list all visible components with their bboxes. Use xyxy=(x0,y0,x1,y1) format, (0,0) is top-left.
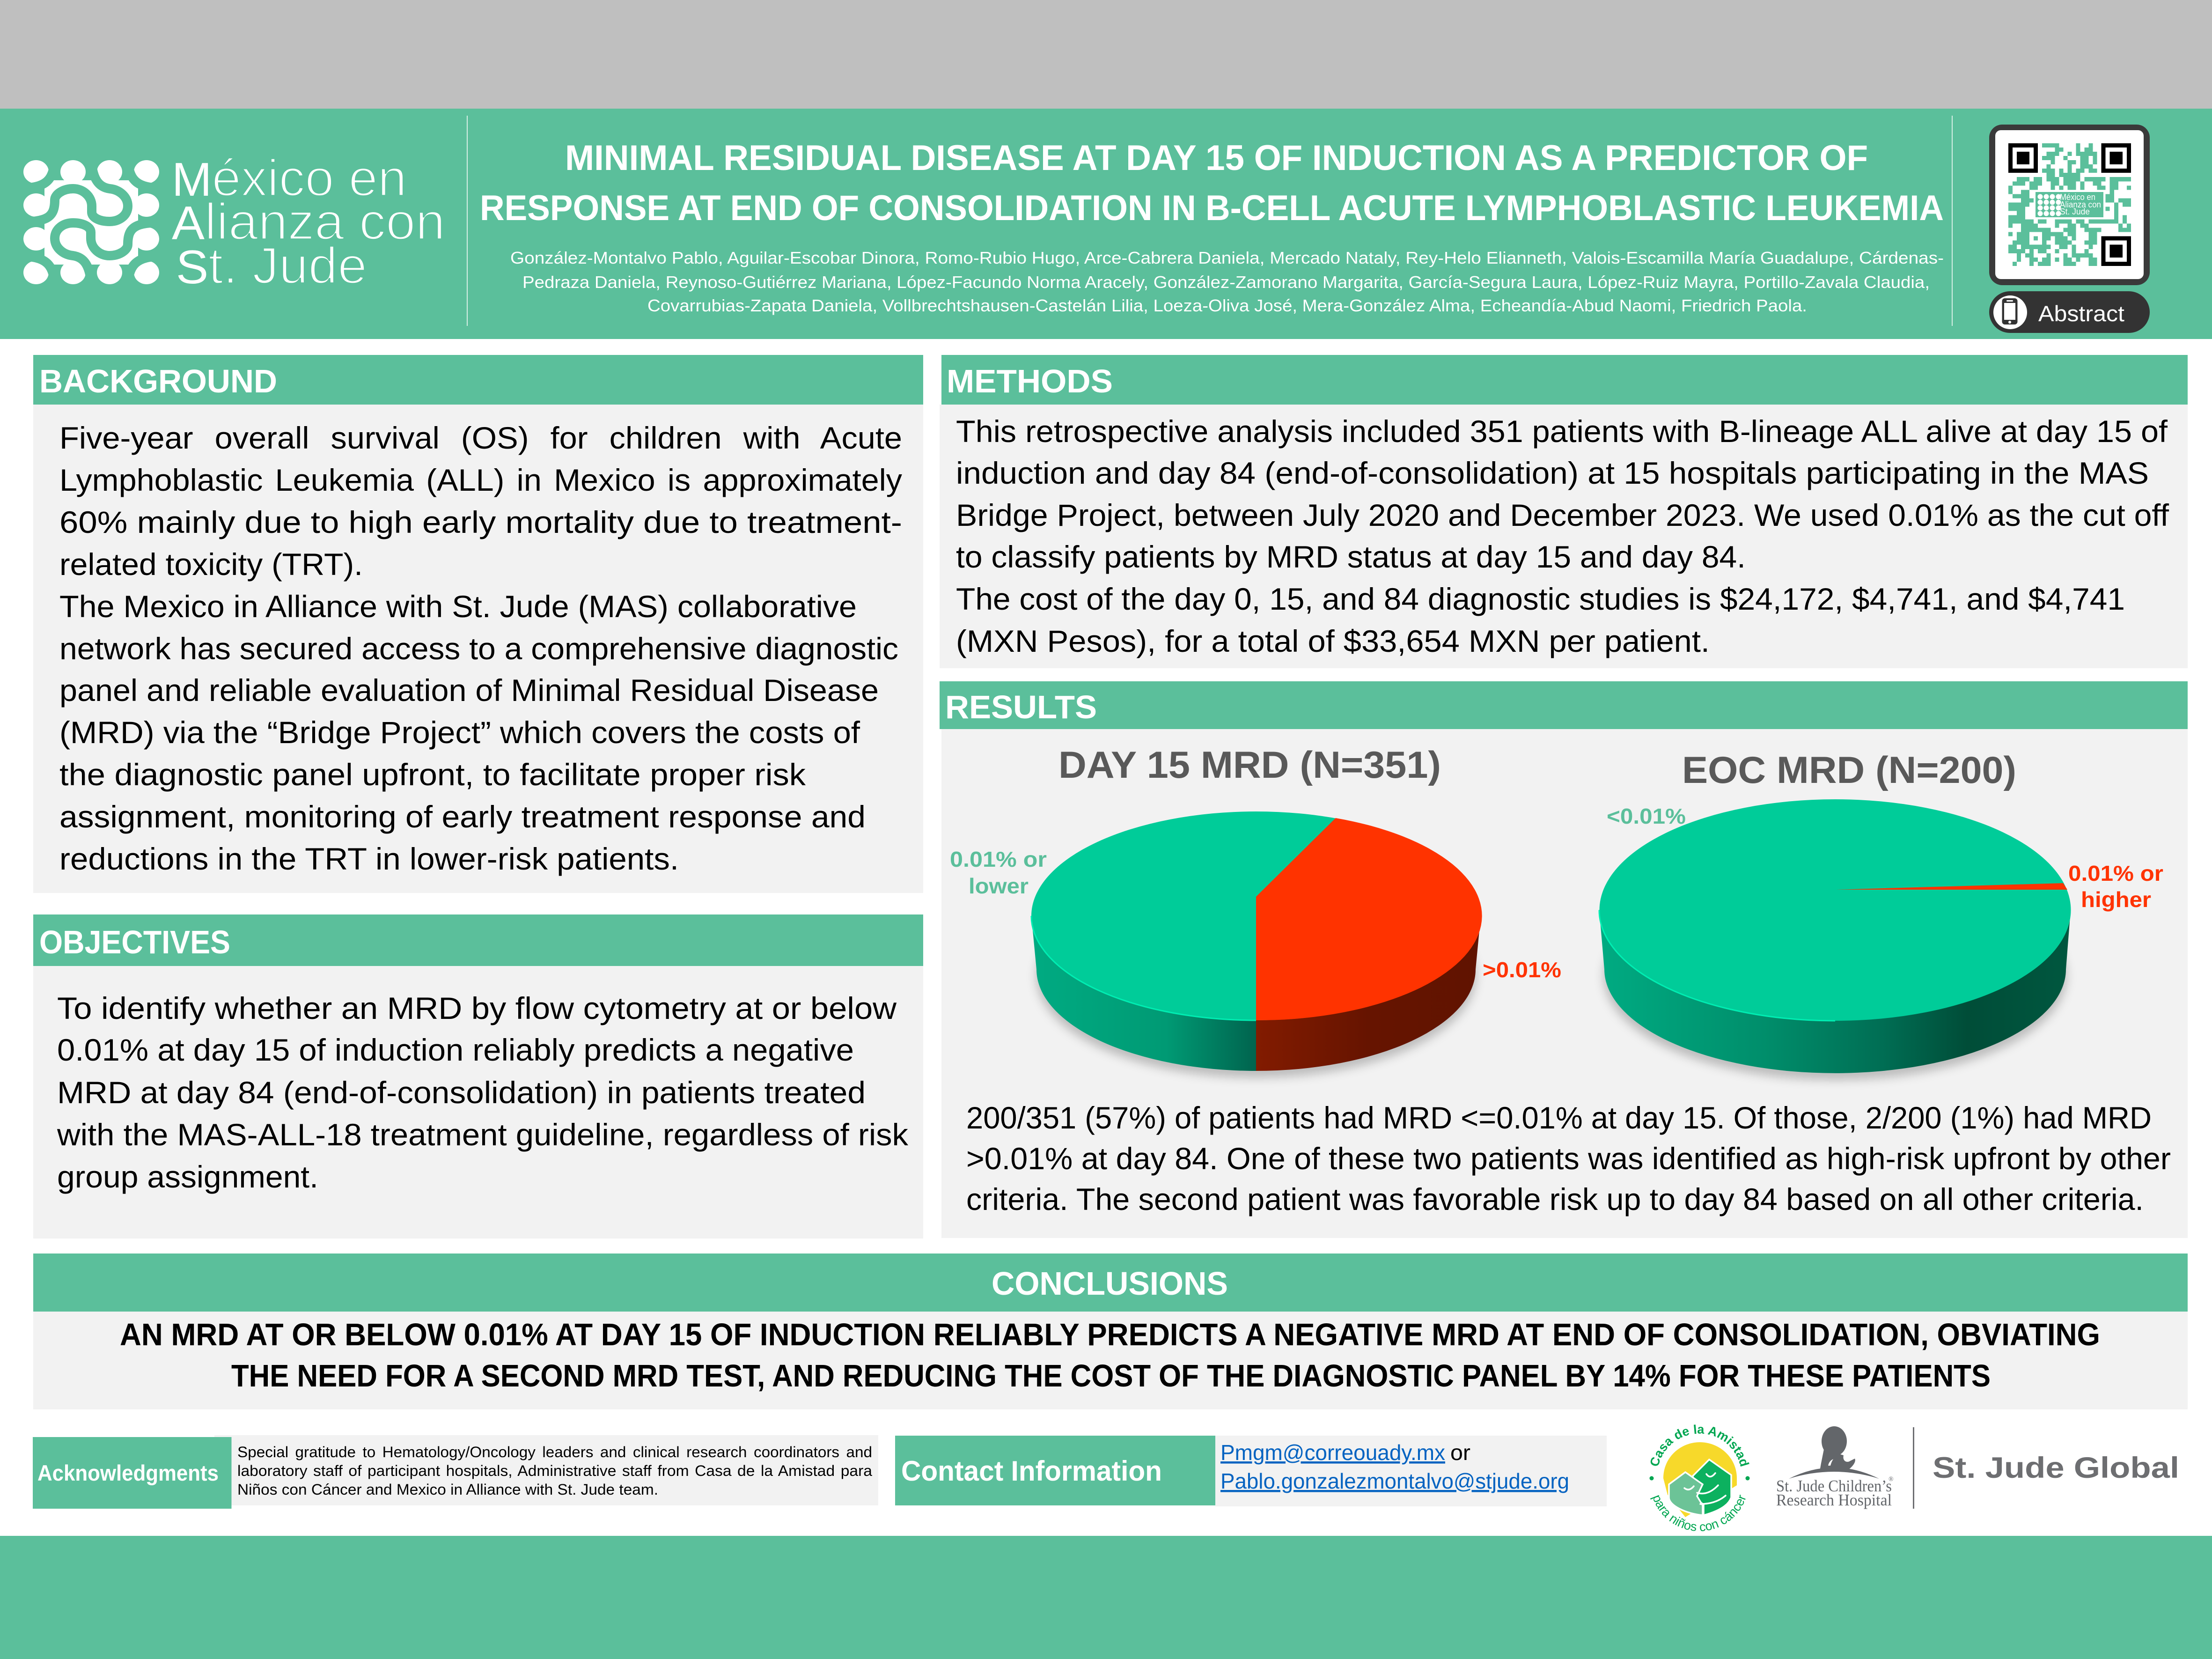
logo: St. Jude Children's Research Hospital: St. Jude Children’s xyxy=(1776,1477,1892,1495)
background body text: The Mexico in Alliance with St. Jude (MAS) collaborative xyxy=(59,589,857,624)
legend label: 0.01% or lower xyxy=(950,847,1047,898)
contact information: Pablo.gonzalezmontalvo@stjude.org xyxy=(1220,1469,1569,1493)
panel: methods xyxy=(940,355,2188,668)
methods body text: The cost of the day 0, 15, and 84 diagnostic studies is $24,172, $4,741, and $4,741 xyxy=(956,582,2125,616)
acknowledgments: laboratory staff of participant hospitals, Administrative staff from Casa de la Amistad para xyxy=(237,1462,872,1479)
results body text xyxy=(966,1100,2171,1217)
logo: México en Alianza con St. Jude: Alianza con xyxy=(172,193,445,251)
logo: St. Jude Global: St. Jude Global xyxy=(1933,1452,2179,1484)
background body text: Five-year overall survival (OS) for children with Acute xyxy=(59,420,902,455)
methods body text: Bridge Project, between July 2020 and December 2023. We used 0.01% as the cut off xyxy=(956,498,2169,532)
logo: México en Alianza con St. Jude: St. Jude xyxy=(176,237,367,295)
legend label: 0.01% or higher: 0.01% or xyxy=(2068,861,2163,885)
heading: methods: METHODS xyxy=(947,363,1113,399)
legend label: 0.01% or higher xyxy=(2068,861,2163,912)
methods body text: to classify patients by MRD status at day 15 and day 84. xyxy=(956,539,1746,574)
results body text: >0.01% at day 84. One of these two patients was identified as high-risk upfront by other xyxy=(966,1141,2171,1176)
chart title: DAY 15 MRD (N=351) xyxy=(1058,744,1441,786)
objectives body text: MRD at day 84 (end-of-consolidation) in patients treated xyxy=(57,1075,866,1110)
legend label: 0.01% or lower: 0.01% or xyxy=(950,847,1047,871)
logo: Casa de la Amistad: Casa de la Amistad xyxy=(1647,1422,1752,1468)
logo: St. Jude Children's Research Hospital: ® xyxy=(1889,1476,1894,1483)
logo: Casa de la Amistad xyxy=(1647,1422,1752,1534)
logo: St. Jude Children's Research Hospital xyxy=(1776,1426,1894,1509)
logo: México en Alianza con St. Jude: México en xyxy=(172,149,407,207)
objectives body text: with the MAS-ALL-18 treatment guideline, regardless of risk xyxy=(57,1117,909,1152)
logo: Casa de la Amistad: para niños con cáncer xyxy=(1650,1493,1749,1534)
poster title xyxy=(480,138,1944,228)
methods body text: (MXN Pesos), for a total of $33,654 MXN per patient. xyxy=(956,624,1710,658)
QR code xyxy=(1989,125,2150,285)
pie chart: EOC MRD xyxy=(1599,749,2163,1080)
acknowledgments: Niños con Cáncer and Mexico in Alliance with St. Jude team. xyxy=(237,1481,658,1498)
acknowledgments xyxy=(33,1435,878,1509)
abstract pill xyxy=(1989,291,2150,333)
contact information: Pmgm@correouady.mx xyxy=(1220,1440,1445,1465)
authors: Pedraza Daniela, Reynoso-Gutiérrez Mariana, López-Facundo Norma Aracely, González-Zamorano Margarita, García-Segura Laura, López-Ruiz Mayra, Portillo-Zavala Claudia, xyxy=(522,273,1930,292)
heading: objectives: OBJECTIVES xyxy=(39,924,230,960)
background body text xyxy=(59,420,902,876)
heading: conclusions: CONCLUSIONS xyxy=(992,1265,1228,1302)
results body text: 200/351 (57%) of patients had MRD <=0.01% at day 15. Of those, 2/200 (1%) had MRD xyxy=(966,1100,2152,1135)
heading: background: BACKGROUND xyxy=(39,363,277,399)
legend label: below 0.01%: <0.01% xyxy=(1607,804,1686,828)
contact information: Contact Information xyxy=(901,1455,1162,1487)
authors: González-Montalvo Pablo, Aguilar-Escobar Dinora, Romo-Rubio Hugo, Arce-Cabrera Daniela, Mercado Nataly, Rey-Helo Elianneth, Valois-Escamilla María Guadalupe, Cárdenas- xyxy=(510,248,1944,267)
QR code: México en xyxy=(2060,192,2095,202)
objectives body text: To identify whether an MRD by flow cytometry at or below xyxy=(57,991,897,1025)
abstract pill: Abstract xyxy=(2038,301,2124,326)
QR code: Alianza con xyxy=(2060,200,2101,209)
poster title: MINIMAL RESIDUAL DISEASE AT DAY 15 OF INDUCTION AS A PREDICTOR OF xyxy=(565,138,1868,178)
background body text: (MRD) via the “Bridge Project” which covers the costs of xyxy=(59,715,860,750)
panel: conclusions xyxy=(33,1253,2188,1409)
authors xyxy=(510,248,1944,315)
methods body text: This retrospective analysis included 351 patients with B-lineage ALL alive at day 15 of xyxy=(956,414,2168,449)
header banner xyxy=(0,109,2212,339)
background body text: network has secured access to a comprehensive diagnostic xyxy=(59,631,898,666)
background body text: the diagnostic panel upfront, to facilitate proper risk xyxy=(59,757,806,792)
conclusions text: AN MRD AT OR BELOW 0.01% AT DAY 15 OF INDUCTION RELIABLY PREDICTS A NEGATIVE MRD AT END OF CONSOLIDATION, OBVIATING xyxy=(120,1317,2100,1352)
pie chart: day 15 MRD xyxy=(950,744,1561,1078)
objectives body text: 0.01% at day 15 of induction reliably predicts a negative xyxy=(57,1032,854,1067)
background body text: 60% mainly due to high early mortality due to treatment- xyxy=(59,505,902,539)
logo: St. Jude Children's Research Hospital: Research Hospital xyxy=(1776,1491,1892,1509)
background body text: assignment, monitoring of early treatment response and xyxy=(59,799,866,834)
chart title: EOC MRD (N=200) xyxy=(1682,749,2016,791)
objectives body text xyxy=(57,991,909,1194)
methods body text: induction and day 84 (end-of-consolidation) at 15 hospitals participating in the MAS xyxy=(956,456,2149,490)
heading: results: RESULTS xyxy=(945,689,1097,725)
acknowledgments: Acknowledgments xyxy=(37,1460,219,1485)
legend label: above 0.01%: >0.01% xyxy=(1483,958,1561,982)
legend label: 0.01% or lower: lower xyxy=(969,874,1029,898)
logo: México en Alianza con St. Jude xyxy=(19,149,445,295)
authors: Covarrubias-Zapata Daniela, Vollbrechtshausen-Castelán Lilia, Loeza-Oliva José, Mera-González Alma, Echeandía-Abud Naomi, Friedrich Paola. xyxy=(647,296,1807,315)
background body text: reductions in the TRT in lower-risk patients. xyxy=(59,841,679,876)
background body text: Lymphoblastic Leukemia (ALL) in Mexico is approximately xyxy=(59,463,902,497)
QR code: St. Jude xyxy=(2060,207,2090,216)
panel: background xyxy=(33,355,923,893)
results body text: criteria. The second patient was favorable risk up to day 84 based on all other criteria. xyxy=(966,1182,2144,1217)
poster title: RESPONSE AT END OF CONSOLIDATION IN B-CELL ACUTE LYMPHOBLASTIC LEUKEMIA xyxy=(480,188,1944,228)
contact information: or xyxy=(1450,1440,1470,1465)
acknowledgments: Special gratitude to Hematology/Oncology leaders and clinical research coordinators and xyxy=(237,1444,872,1460)
background body text: panel and reliable evaluation of Minimal Residual Disease xyxy=(59,673,879,708)
legend label: 0.01% or higher: higher xyxy=(2081,887,2151,912)
divider between logos xyxy=(1913,1427,1914,1509)
top grey band xyxy=(0,0,2212,109)
background body text: related toxicity (TRT). xyxy=(59,547,363,582)
bottom green band xyxy=(0,1536,2212,1659)
methods body text xyxy=(956,414,2169,658)
panel: results xyxy=(940,681,2188,1238)
contact information xyxy=(895,1436,1607,1506)
conclusions text xyxy=(120,1317,2100,1394)
objectives body text: group assignment. xyxy=(57,1159,318,1194)
panel: objectives xyxy=(33,914,923,1239)
conclusions text: THE NEED FOR A SECOND MRD TEST, AND REDUCING THE COST OF THE DIAGNOSTIC PANEL BY 14% FOR THESE PATIENTS xyxy=(231,1358,1991,1394)
